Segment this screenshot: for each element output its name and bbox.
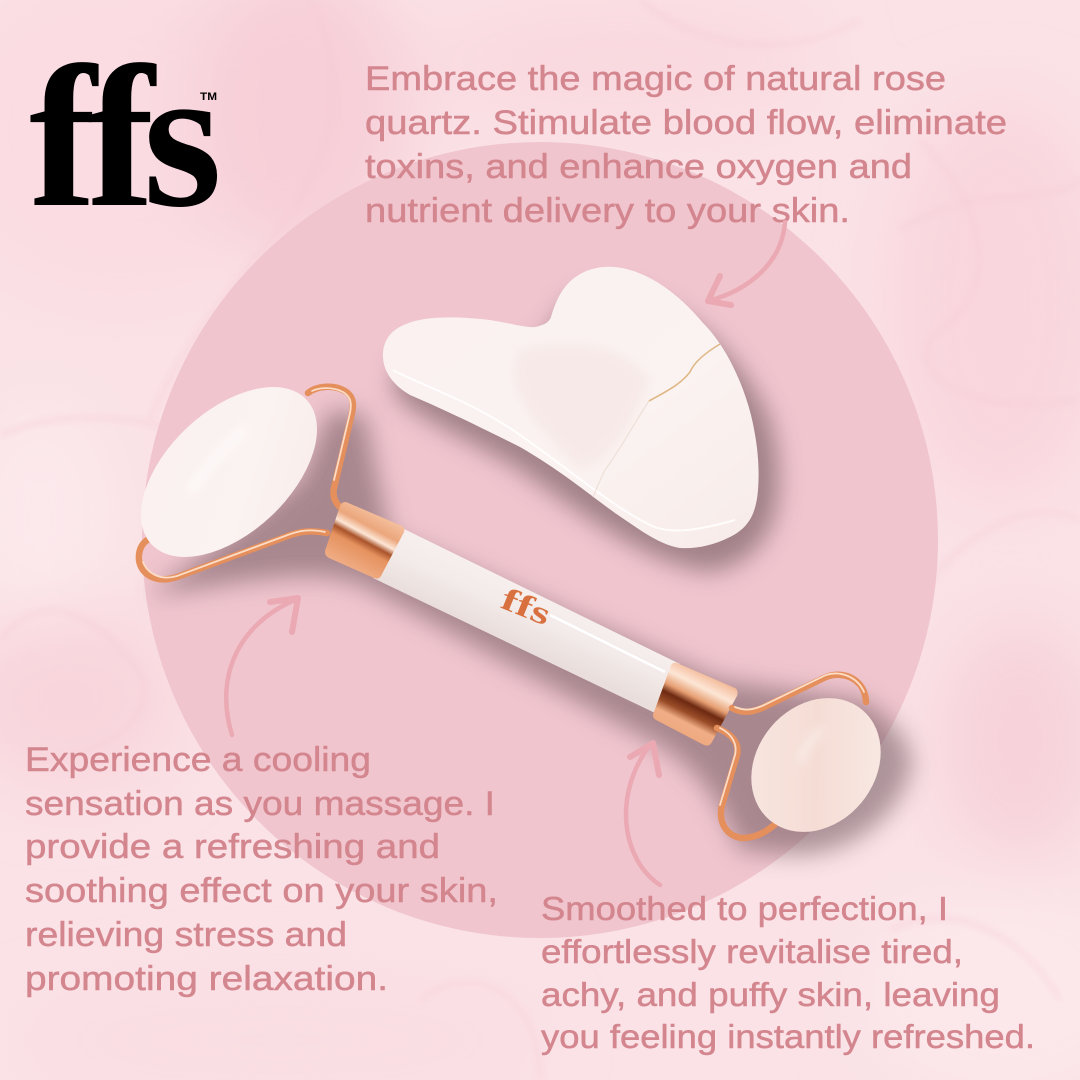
text block: rose quartz intro: nutrient delivery to your skin. (365, 192, 850, 230)
wire frame: right (717, 675, 866, 838)
left roller stone (110, 355, 348, 589)
text block: smoothed to perfection (541, 890, 1035, 1055)
text block: cooling sensation: relieving stress and (25, 916, 347, 954)
text block: cooling sensation: soothing effect on your skin, (25, 872, 498, 910)
collar: right (653, 663, 738, 746)
wire highlight: right (720, 674, 864, 805)
text block: rose quartz intro (365, 60, 1007, 230)
arrow: to gua sha (708, 222, 785, 305)
text block: rose quartz intro: toxins, and enhance oxygen and (365, 148, 912, 186)
mini logo on handle: ffs (496, 580, 556, 632)
text block: smoothed to perfection: you feeling instantly refreshed. (541, 1018, 1035, 1055)
arrow: to right roller (626, 743, 660, 885)
trademark mark: TM (200, 91, 217, 103)
arrow: to left roller (226, 598, 298, 735)
text block: rose quartz intro: Embrace the magic of natural rose (365, 60, 946, 98)
text block: cooling sensation (25, 741, 498, 998)
roller (110, 355, 912, 858)
logo: ffs: ffs (29, 24, 222, 249)
text block: smoothed to perfection: achy, and puffy skin, leaving (541, 976, 1000, 1013)
gua sha stone (383, 267, 779, 572)
pink circle backdrop (142, 142, 938, 938)
right roller stone (725, 672, 907, 858)
handle (373, 527, 680, 713)
text block: cooling sensation: provide a refreshing and (25, 828, 440, 866)
roller drop shadow (150, 410, 912, 855)
text block: cooling sensation: promoting relaxation. (25, 960, 388, 998)
text block: cooling sensation: sensation as you massage. I (25, 785, 495, 823)
text block: smoothed to perfection: effortlessly revitalise tired, (541, 933, 963, 970)
text block: smoothed to perfection: Smoothed to perfection, I (541, 890, 948, 927)
text block: rose quartz intro: quartz. Stimulate blood flow, eliminate (365, 104, 1007, 142)
wire highlight: left (143, 388, 351, 578)
collar: left (325, 502, 404, 579)
wire frame: left (139, 387, 353, 579)
text block: cooling sensation: Experience a cooling (25, 741, 371, 779)
